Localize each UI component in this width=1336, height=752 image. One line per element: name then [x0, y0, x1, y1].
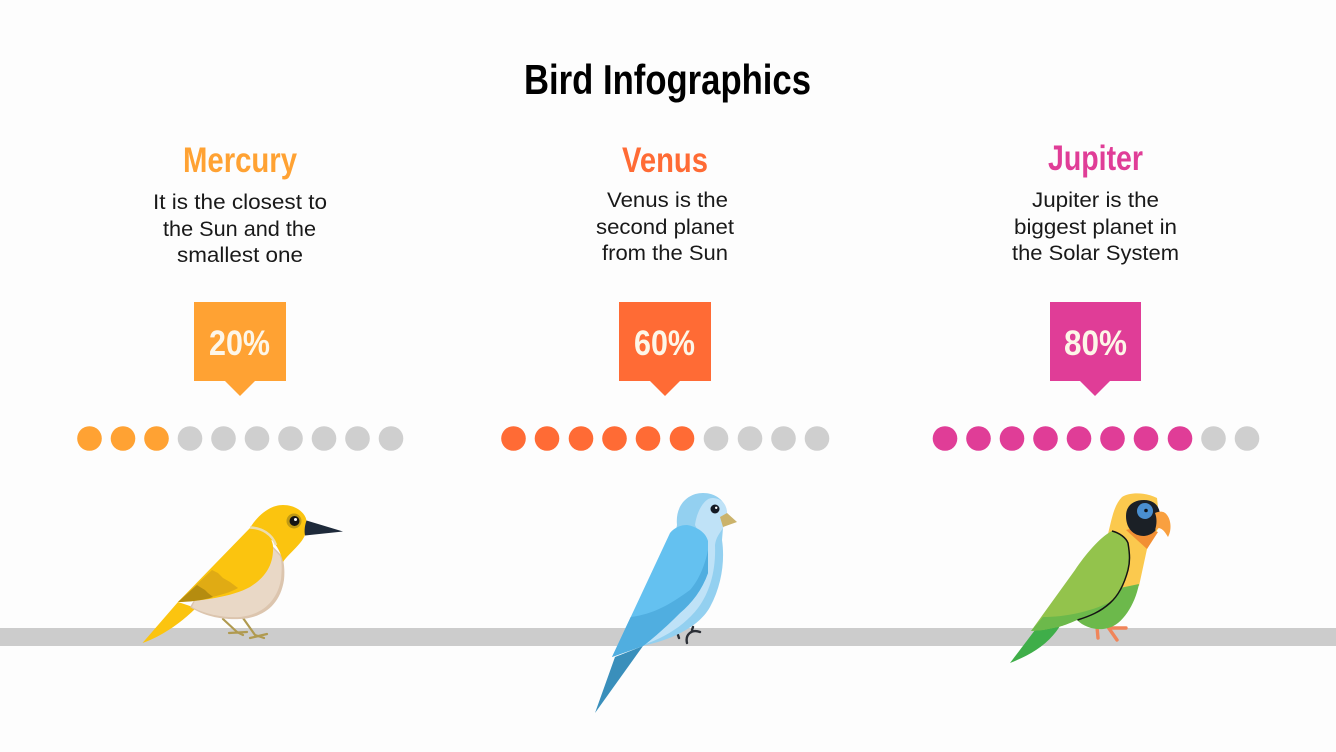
dot scale: 8 of 10 — [933, 426, 1259, 451]
text: Venus description: Venus is the — [607, 189, 728, 212]
panel: Mercury — [77, 141, 403, 643]
icon: blue bird — [595, 493, 737, 713]
heading: Jupiter: Jupiter — [1048, 139, 1143, 178]
text: Jupiter description: biggest planet in — [1014, 216, 1177, 239]
text: Mercury description: It is the closest to — [153, 191, 327, 214]
heading: Mercury: Mercury — [183, 141, 297, 180]
text: Jupiter description — [1012, 189, 1179, 265]
title: Bird Infographics — [524, 56, 811, 103]
text: Mercury description: smallest one — [177, 244, 303, 267]
callout: 60% — [619, 302, 711, 396]
text: Mercury description — [153, 191, 327, 267]
panel: Jupiter — [933, 139, 1259, 663]
text: Mercury description: the Sun and the — [163, 218, 316, 241]
callout: 20% — [194, 302, 286, 396]
panel: Venus — [501, 141, 829, 713]
icon: yellow bird — [142, 505, 343, 643]
icon: green parrot — [1010, 493, 1171, 663]
dot scale: 6 of 10 — [501, 426, 829, 451]
heading: Venus: Venus — [622, 141, 708, 180]
dot scale: 3 of 10 — [77, 426, 403, 451]
text: Jupiter description: Jupiter is the — [1032, 189, 1159, 212]
callout: 80%: 80% — [1064, 324, 1127, 363]
callout: 20%: 20% — [209, 324, 270, 363]
wire perch — [0, 628, 1336, 646]
callout: 80% — [1050, 302, 1141, 396]
text: Jupiter description: the Solar System — [1012, 242, 1179, 265]
text: Venus description — [596, 189, 734, 265]
text: Venus description: second planet — [596, 216, 734, 239]
callout: 60%: 60% — [634, 324, 695, 363]
text: Venus description: from the Sun — [602, 242, 728, 265]
